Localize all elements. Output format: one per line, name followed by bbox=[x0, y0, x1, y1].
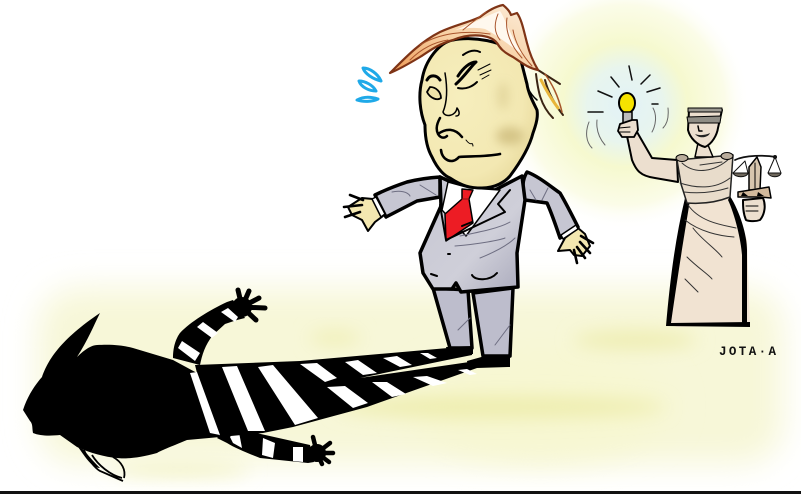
upper drape bbox=[676, 152, 733, 203]
bottom border line bbox=[0, 491, 801, 494]
scales bbox=[733, 156, 781, 177]
head with blindfold bbox=[687, 108, 722, 147]
legs bbox=[433, 288, 513, 356]
shadow figure in prison stripes bbox=[23, 290, 510, 481]
sword and hand bbox=[738, 157, 771, 221]
red tie bbox=[445, 189, 473, 241]
icon: blue sweat drops bbox=[357, 68, 381, 101]
Lady Justice bbox=[587, 66, 781, 327]
shadow: lower arm bbox=[217, 423, 333, 464]
robe bbox=[666, 196, 750, 327]
cheek shading bbox=[496, 82, 524, 145]
shadow: raised arm bbox=[173, 290, 265, 365]
shirt collar bbox=[442, 182, 500, 236]
right arm and hand bbox=[523, 172, 593, 263]
side ear lines bbox=[524, 72, 537, 100]
light rays bbox=[588, 66, 660, 112]
lapels and pocket bbox=[431, 190, 510, 279]
orange swept hair bbox=[390, 5, 538, 73]
shoes bbox=[446, 346, 510, 367]
left arm and hand bbox=[344, 177, 440, 231]
shadow: striped legs bbox=[190, 348, 510, 437]
jacket bbox=[420, 176, 525, 292]
face: eyes, brows, nose, mouth bbox=[427, 51, 500, 161]
raised arm bbox=[627, 132, 678, 182]
neck bbox=[695, 143, 713, 157]
man in grey suit bbox=[344, 5, 593, 367]
hand holding bulb bbox=[618, 93, 638, 137]
jacket creases bbox=[392, 185, 548, 345]
artist signature: JOTA·A bbox=[719, 345, 778, 359]
motion lines bbox=[587, 108, 668, 148]
back hair wisps bbox=[536, 70, 563, 118]
shadow: head and hair bbox=[23, 313, 220, 481]
light glow behind the bulb bbox=[500, 0, 750, 230]
head bbox=[420, 39, 537, 188]
